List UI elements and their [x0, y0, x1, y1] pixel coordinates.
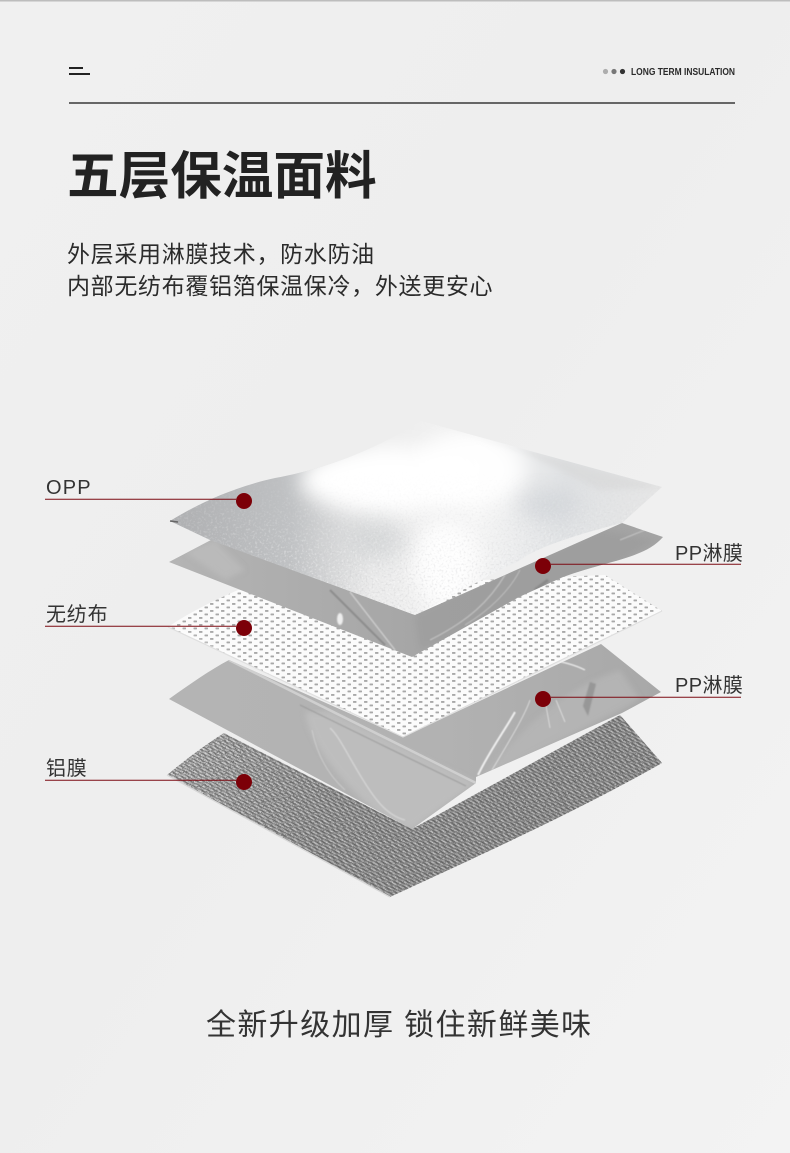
label: PP film lower: PP淋膜	[675, 674, 743, 697]
layer 2: PP film	[169, 523, 663, 657]
icon: menu bars	[69, 67, 90, 75]
header tag: dots and label	[603, 67, 735, 78]
label: aluminium film	[45, 757, 252, 790]
layer 4: PP film	[160, 640, 670, 835]
label: PP film upper	[535, 542, 743, 574]
description text: 内部无纺布覆铝箔保温保冷，外送更安心	[67, 273, 493, 299]
header bar	[69, 67, 735, 104]
label: aluminium film: 铝膜	[46, 757, 88, 780]
label: PP film lower	[535, 674, 743, 707]
label: OPP: OPP	[46, 477, 92, 499]
layer 5: aluminium film fabric	[160, 710, 670, 905]
label: non-woven	[45, 603, 252, 636]
layer 1: OPP foil	[170, 432, 662, 615]
layer 3: non-woven white fabric	[168, 575, 662, 738]
description text	[67, 241, 493, 299]
header tag: dots and label: LONG TERM INSULATION	[631, 67, 735, 78]
label: OPP	[45, 477, 252, 509]
label: non-woven: 无纺布	[46, 603, 108, 626]
footer slogan: 全新升级加厚 锁住新鲜美味	[206, 1009, 593, 1042]
layered material illustration	[160, 415, 670, 905]
label: PP film upper: PP淋膜	[675, 542, 743, 565]
title: 五层保温面料	[67, 147, 377, 205]
description text: 外层采用淋膜技术，防水防油	[67, 241, 375, 267]
